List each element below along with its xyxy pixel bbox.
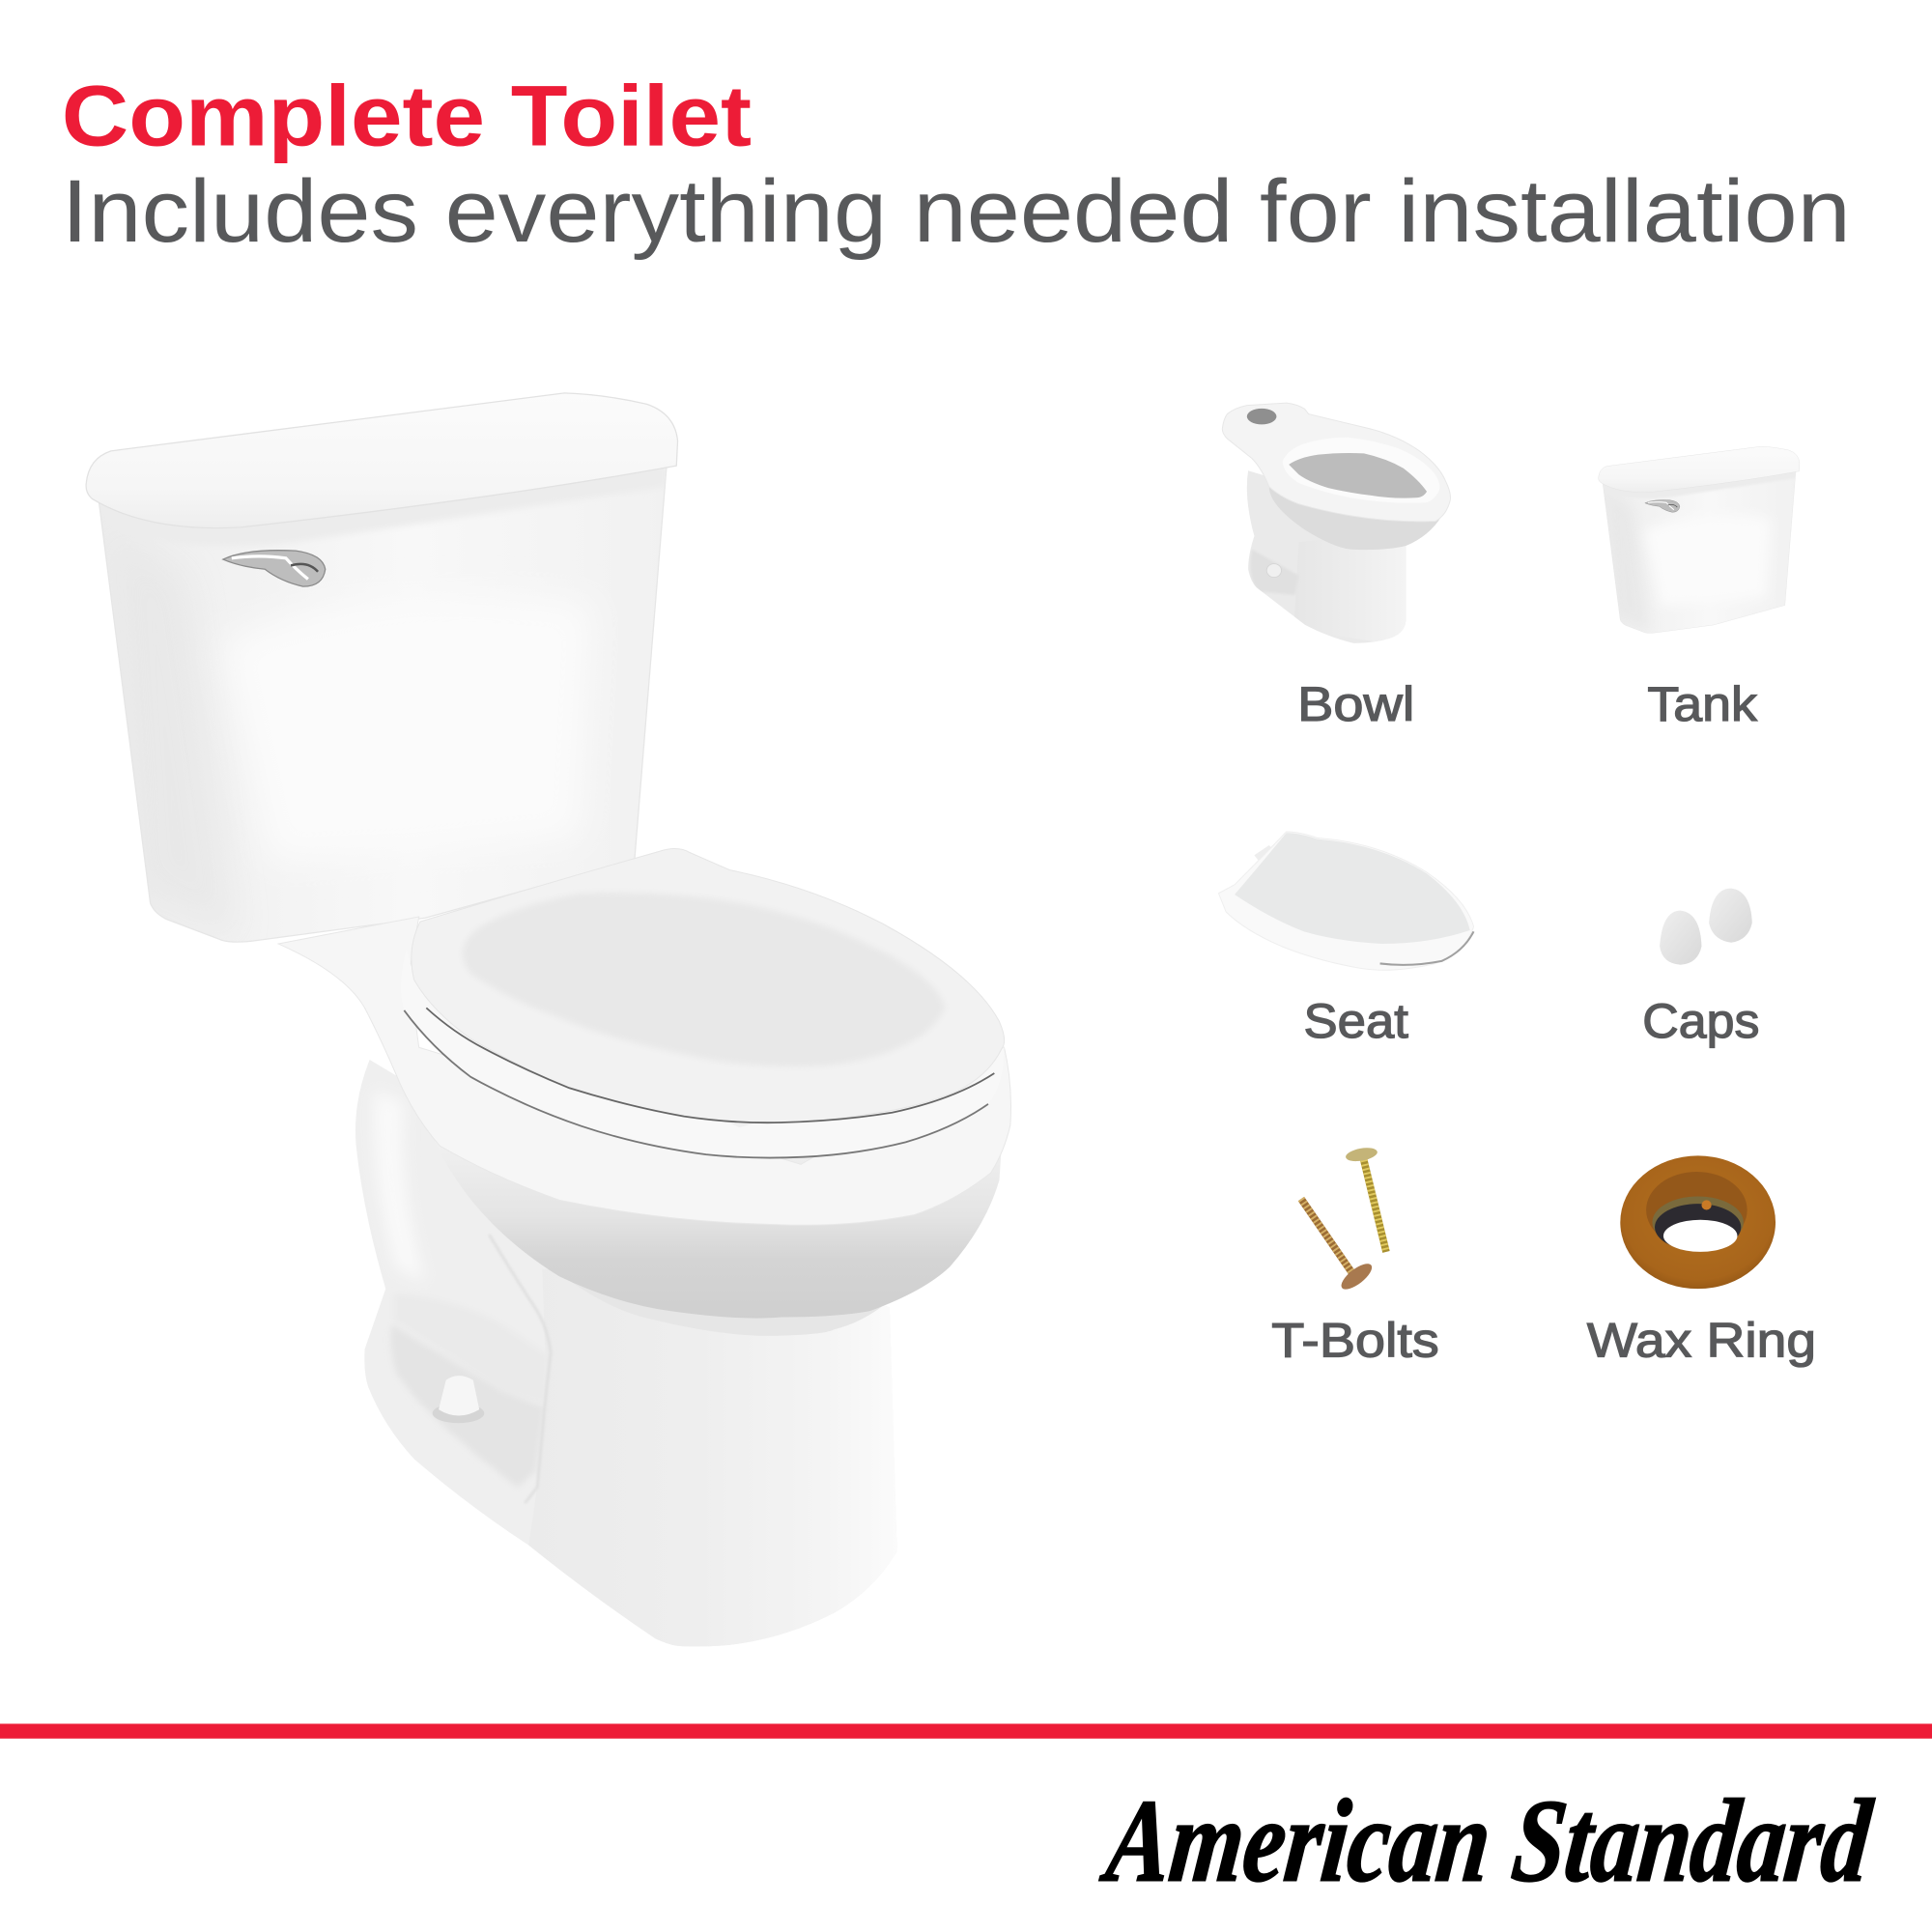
part: seat — [1218, 832, 1474, 1048]
icon: caps — [1660, 889, 1752, 965]
red divider bar — [0, 1723, 1932, 1739]
label: T-Bolts: T-Bolts — [1271, 1313, 1439, 1367]
bolt cap on base — [433, 1376, 484, 1423]
bowl underside — [431, 1109, 1005, 1336]
label: Wax Ring: Wax Ring — [1587, 1313, 1816, 1367]
flush handle — [223, 551, 326, 586]
seat lid — [412, 848, 1005, 1122]
icon: wax ring — [1620, 1155, 1776, 1289]
label: Bowl: Bowl — [1297, 677, 1414, 731]
icon: seat — [1218, 832, 1474, 970]
toilet body and trap — [355, 1060, 899, 1651]
heading: Complete Toilet: Complete Toilet — [62, 68, 752, 164]
title — [62, 68, 1851, 261]
seat gap lines — [404, 1008, 994, 1158]
part: bowl — [1222, 403, 1450, 731]
icon: t-bolts — [1301, 1146, 1386, 1293]
part: caps — [1642, 889, 1759, 1048]
label: Seat: Seat — [1303, 994, 1408, 1048]
label: Caps: Caps — [1642, 994, 1759, 1048]
part: t-bolts — [1271, 1146, 1439, 1367]
part: wax ring — [1587, 1155, 1816, 1367]
tank — [86, 393, 678, 942]
icon: tank — [1599, 446, 1800, 633]
part: tank — [1599, 446, 1800, 731]
icon: bowl — [1222, 403, 1450, 647]
tank lid — [86, 393, 678, 528]
seat ring — [401, 949, 1005, 1158]
label: Tank: Tank — [1647, 677, 1757, 731]
main toilet illustration — [86, 393, 1010, 1651]
subheading: Includes everything needed for installation: Includes everything needed for installation — [62, 162, 1851, 261]
bowl rim and neck — [278, 917, 1010, 1225]
panel: parts — [1218, 403, 1816, 1367]
